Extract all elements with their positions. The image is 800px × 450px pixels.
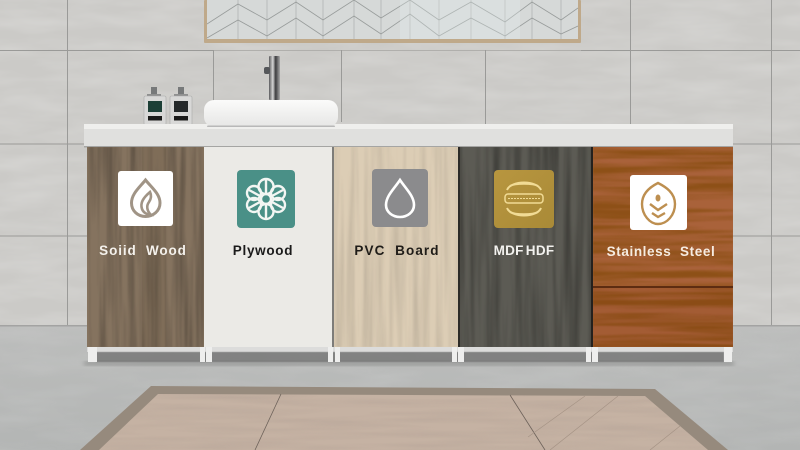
- panel: solid wood door: [87, 147, 204, 347]
- soap bottles: [144, 87, 192, 125]
- panel: PVC board door: [334, 147, 458, 347]
- cabinet legs: [87, 347, 733, 362]
- icon: leaf seed: [630, 175, 687, 230]
- drawer split: [593, 286, 733, 288]
- floor: [0, 325, 800, 450]
- icon: plywood flower: [237, 170, 295, 228]
- label: PVC Board: PVC Board: [354, 243, 440, 258]
- label: MDF HDF: MDF HDF: [494, 243, 554, 258]
- panel: stainless steel door: [593, 147, 733, 347]
- icon: MDF layered disc: [494, 170, 554, 228]
- label: Soiid Wood: Soiid Wood: [99, 243, 187, 258]
- panel: plywood door: [204, 147, 334, 347]
- mirror: [204, 0, 581, 43]
- label: Stainless Steel: Stainless Steel: [607, 244, 715, 259]
- bottle right: [170, 87, 192, 125]
- sink basin: [204, 100, 338, 127]
- icon: PVC drop: [372, 169, 428, 227]
- icon: wood drop: [118, 171, 173, 226]
- countertop: [84, 124, 733, 148]
- faucet: [264, 56, 280, 100]
- bottle left: [144, 87, 166, 125]
- rug: [80, 386, 728, 450]
- panel: MDF HDF door: [458, 147, 593, 347]
- label: Plywood: Plywood: [233, 243, 293, 258]
- wall tiles: [0, 0, 800, 330]
